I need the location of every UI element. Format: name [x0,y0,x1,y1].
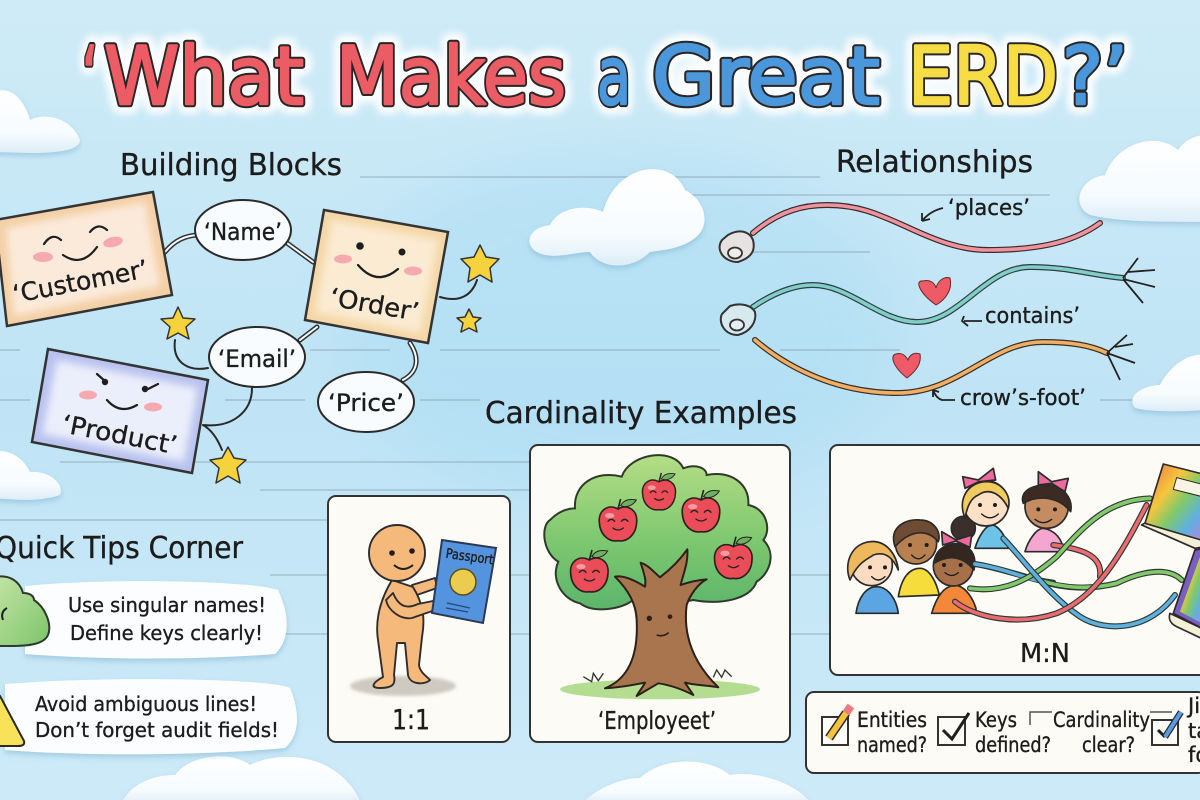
text: keys: Keys [975,708,1017,732]
icon: warning triangle [0,696,24,746]
panel: employeet: ‘Employeet’ [598,706,716,735]
title: ERD [908,30,1058,123]
cloud: top right [1079,135,1200,222]
title: ?’ [1062,30,1128,123]
text: entities: Entities [857,708,927,732]
title: What [104,30,304,123]
text: clipped item: Ji [1186,694,1200,718]
tip 2 [0,679,297,754]
stars [161,245,499,483]
icon: books [1142,464,1200,640]
icon: face [389,548,415,569]
cloud: bottom centre [580,762,812,800]
title: Makes [336,30,566,123]
title: Makes [336,30,566,123]
title: ?’ [1062,30,1128,123]
title: a [597,30,631,123]
heading: building blocks: Building Blocks [120,148,342,183]
heading: cardinality examples: Cardinality Examples [485,396,797,431]
attribute: email [209,327,305,387]
attribute: price: ‘Price’ [328,389,404,417]
cloud: bottom left [120,756,362,800]
icon: passport: Passport [445,546,494,568]
tip 2: Don’t forget audit fields! [35,718,279,742]
title: a [597,30,631,123]
icon: green cloud [0,576,49,646]
text: keys [975,708,1051,757]
icon: checkbox with blue pencil [1152,712,1181,745]
tip 2: Avoid ambiguous lines! [35,692,257,716]
text: cardinality: clear? [1082,733,1135,757]
relationship: places: ‘places’ [948,196,1030,221]
tip 1: Define keys clearly! [70,621,263,645]
heading: relationships: Relationships [836,145,1033,180]
title: ?’ [1062,30,1128,123]
connector lines [165,235,477,450]
attribute: name: ‘Name’ [204,218,282,246]
relationship: contains [721,258,1155,335]
icon: passport [432,540,496,623]
entity: customer: ‘Customer’ [10,254,150,309]
panel: employeet [530,445,790,742]
text: cardinality [1053,708,1150,757]
panel: checklist [806,692,1200,773]
panel: 1:1 [328,496,510,742]
title: ERD [908,30,1058,123]
cloud: centre [529,169,705,266]
tip 1 [0,576,287,658]
heading: quick tips: Quick Tips Corner [0,531,244,566]
title: ‘ [82,30,98,123]
entity: order [305,210,448,343]
text: entities: named? [857,733,927,757]
title: Makes [336,30,566,123]
panel: 1:1: 1:1 [392,703,430,736]
attribute: price [318,372,414,432]
title: Great [652,30,880,123]
attribute: email: ‘Email’ [218,345,296,373]
icon: person [369,525,441,688]
cloud: left middle [0,451,61,500]
attribute: name [195,200,291,260]
entity: product: ‘Product’ [59,409,180,460]
tip 1: Use singular names! [68,593,266,617]
panel: M:N: M:N [1020,639,1070,669]
entity: order: ‘Order’ [328,283,421,327]
title: Great [652,30,880,123]
title: Great [652,30,880,123]
text: clipped item [1186,694,1200,767]
title: ‘ [82,30,98,123]
title: a [597,30,631,123]
entity: customer [0,192,172,326]
title [82,30,1128,123]
text: keys: defined? [975,733,1051,757]
title: What [104,30,304,123]
icon: checkbox [938,713,969,745]
illustration: tree [544,455,771,699]
illustration: children, tangled lines and books [848,464,1200,640]
relationship: contains: contains’ [985,304,1080,329]
text: cardinality: Cardinality [1053,708,1150,732]
cloud: top left [0,90,80,153]
text: entities [857,708,927,757]
icon: tangled lines [955,498,1182,626]
relationship: crow's foot [755,335,1135,411]
title: ‘ [82,30,98,123]
icon: checkbox with pencil [822,706,851,745]
panel: M:N [830,445,1200,675]
cloud: right middle [1132,355,1200,411]
entity: product [32,349,208,473]
title: ERD [908,30,1058,123]
title: What [104,30,304,123]
relationship: crow's foot: crow’s-foot’ [960,386,1086,411]
relationship: places [720,196,1100,262]
